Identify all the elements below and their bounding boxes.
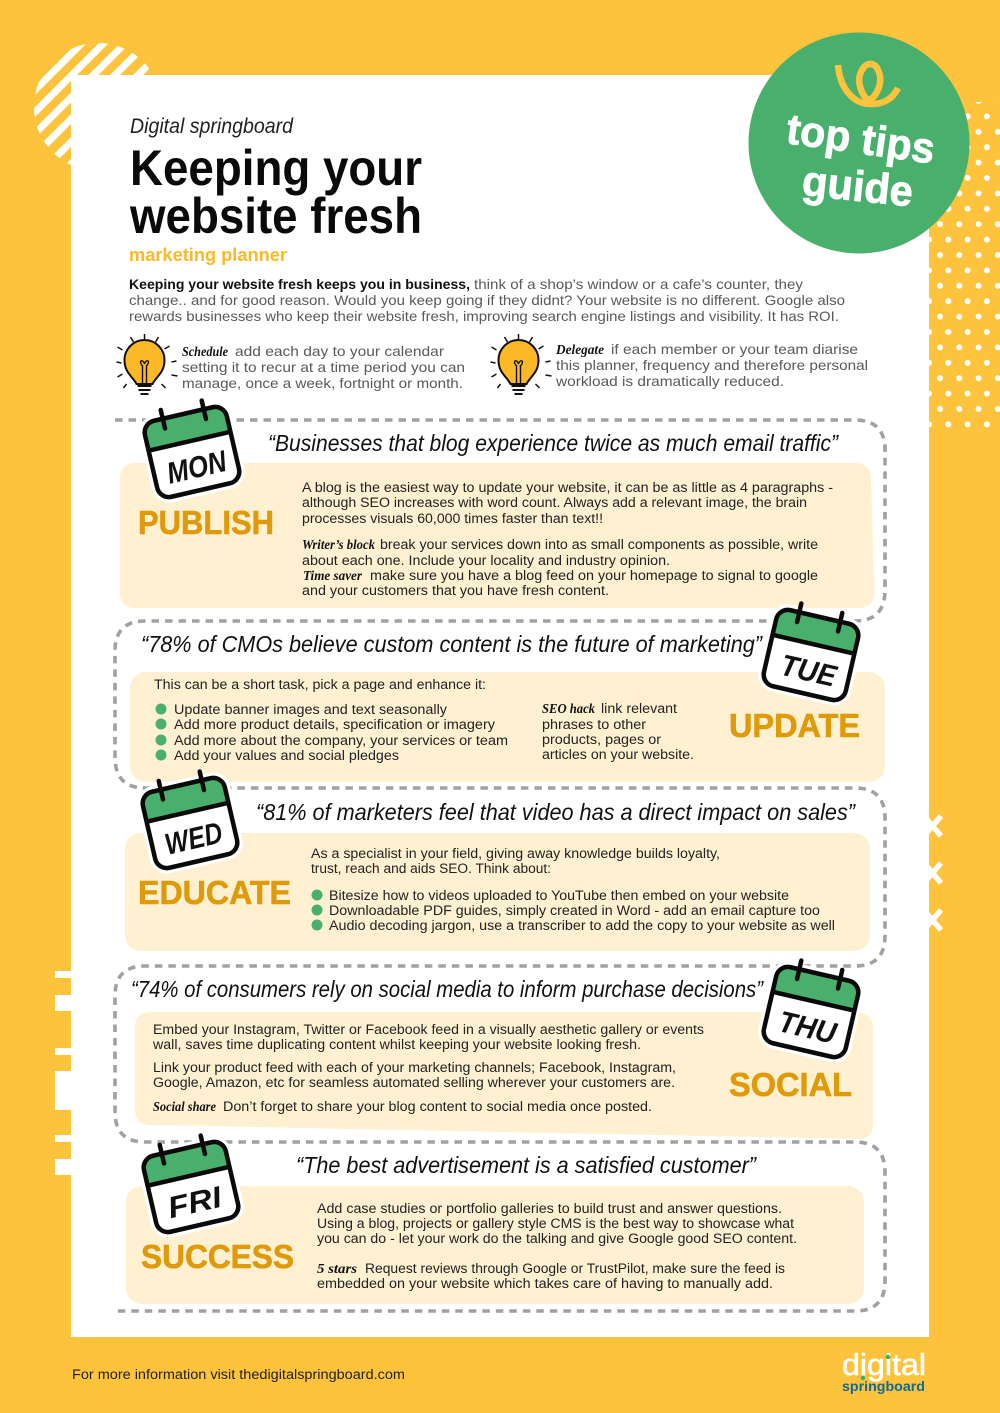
- heading: EDUCATE: [138, 875, 291, 912]
- bullet list: Update banner images and text seasonally: [174, 702, 447, 717]
- body copy: Using a blog, projects or gallery style CMS is the best way to showcase what: [317, 1216, 794, 1231]
- bullet list: Add more about the company, your services or team: [174, 733, 508, 748]
- delegate text: Delegate: [555, 343, 604, 358]
- panel background: [125, 833, 870, 951]
- quote: “Businesses that blog experience twice as much email traffic”: [268, 430, 839, 456]
- intro paragraph: change.. and for good reason. Would you keep going if they didnt? Your website is no different. Google also: [129, 292, 845, 308]
- bullet list: Audio decoding jargon, use a transcriber to add the copy to your website as well: [329, 918, 835, 933]
- body copy: [302, 480, 833, 598]
- panel background: [120, 463, 874, 608]
- bullet list: Bitesize how to videos uploaded to YouTube then embed on your website: [329, 888, 789, 903]
- heading: SUCCESS: [141, 1239, 294, 1276]
- body copy: make sure you have a blog feed on your homepage to signal to google: [370, 568, 818, 583]
- quote: “78% of CMOs believe custom content is the future of marketing”: [141, 631, 763, 657]
- badge text: top tips: top tips: [784, 105, 938, 174]
- body copy: Time saver: [303, 569, 363, 584]
- body copy: break your services down into as small components as possible, write: [380, 537, 818, 552]
- footer link: For more information visit thedigitalspringboard.com: [72, 1367, 405, 1382]
- body copy: Add case studies or portfolio galleries to build trust and answer questions.: [317, 1201, 782, 1216]
- schedule text: [182, 343, 465, 391]
- decorative striped circle: [34, 43, 150, 165]
- body copy: 5 stars: [317, 1262, 358, 1277]
- calendar: FRI: FRI: [165, 1181, 225, 1225]
- body copy: Embed your Instagram, Twitter or Facebook feed in a visually aesthetic gallery or events: [153, 1022, 704, 1037]
- body copy: Writer’s block: [302, 538, 375, 553]
- footer logo: digital: [842, 1348, 926, 1382]
- quote: “74% of consumers rely on social media to inform purchase decisions”: [131, 976, 764, 1002]
- body copy: A blog is the easiest way to update your website, it can be as little as 4 paragraphs -: [302, 480, 833, 495]
- schedule text: Schedule: [182, 345, 228, 360]
- intro paragraph: Keeping your website fresh keeps you in business,: [129, 276, 470, 292]
- body copy: Social share: [153, 1100, 216, 1115]
- panel background: [126, 1186, 864, 1304]
- intro paragraph: think of a shop’s window or a cafe’s counter, they: [474, 276, 803, 292]
- heading: SOCIAL: [729, 1067, 852, 1104]
- calendar: MON: [140, 396, 242, 499]
- bullet list: Add more product details, specification or imagery: [174, 717, 495, 732]
- SEO hack note: phrases to other: [542, 717, 647, 732]
- calendar: TUE: [761, 599, 863, 702]
- quote: “The best advertisement is a satisfied customer”: [296, 1152, 757, 1178]
- delegate text: this planner, frequency and therefore personal: [556, 357, 868, 373]
- calendar: TUE: TUE: [777, 649, 840, 694]
- brand line: Digital springboard: [130, 115, 294, 138]
- white page panel: [71, 75, 929, 1337]
- body copy: wall, saves time duplicating content whilst keeping your website looking fresh.: [152, 1037, 641, 1052]
- tip: schedule: [116, 334, 465, 394]
- intro copy: [311, 846, 720, 876]
- heading: UPDATE: [729, 708, 860, 745]
- schedule text: add each day to your calendar: [235, 343, 444, 359]
- SEO hack note: articles on your website.: [542, 747, 694, 762]
- calendar: THU: [761, 956, 863, 1059]
- body copy: Link your product feed with each of your marketing channels; Facebook, Instagram,: [153, 1060, 676, 1075]
- badge: top tips guide: [748, 32, 970, 254]
- intro copy: trust, reach and aids SEO. Think about:: [311, 861, 551, 876]
- dashed connector running through all sections: [115, 420, 885, 1311]
- header: [129, 115, 422, 265]
- body copy: you can do - let your work do the talking and give Google good SEO content.: [317, 1231, 797, 1246]
- title: website fresh: [129, 188, 422, 244]
- icon: springboard swirl: [838, 64, 898, 104]
- intro paragraph: rewards businesses who keep their website fresh, improving search engine listings and visibility. It has ROI.: [129, 308, 839, 324]
- calendar: WED: [138, 767, 240, 870]
- body copy: Google, Amazon, etc for seamless automated selling wherever your customers are.: [153, 1075, 675, 1090]
- schedule text: manage, once a week, fortnight or month.: [182, 375, 463, 391]
- tip: delegate: [490, 334, 868, 394]
- body copy: processes visuals 60,000 times faster than text!!: [302, 511, 603, 526]
- decorative crosses: [924, 816, 941, 930]
- body copy: Don’t forget to share your blog content to social media once posted.: [223, 1099, 652, 1114]
- icon: light bulb: [116, 334, 178, 394]
- body copy: [152, 1022, 704, 1115]
- calendar: THU: THU: [775, 1005, 840, 1051]
- bullet list: [156, 702, 508, 763]
- calendar: MON: MON: [164, 445, 231, 491]
- quote: “81% of marketers feel that video has a direct impact on sales”: [256, 799, 856, 825]
- subtitle: marketing planner: [129, 244, 287, 265]
- panel: Tuesday update: [130, 599, 885, 782]
- body copy: [317, 1201, 797, 1291]
- panel: Monday publish: [120, 396, 874, 608]
- title: Keeping your: [130, 140, 422, 196]
- icon: light bulb: [490, 334, 552, 394]
- decorative left notches: [55, 971, 71, 1175]
- body copy: about each one. Include your locality and industry opinion.: [302, 553, 670, 568]
- SEO hack note: [542, 701, 694, 762]
- decorative dot pattern: [925, 102, 1000, 432]
- panel: Friday success: [126, 1131, 864, 1304]
- body copy: and your customers that you have fresh content.: [302, 583, 609, 598]
- calendar: FRI: [139, 1131, 241, 1234]
- panel background: [130, 672, 885, 782]
- delegate text: if each member or your team diarise: [611, 341, 858, 357]
- delegate text: workload is dramatically reduced.: [555, 373, 784, 389]
- panel: Thursday social: [131, 956, 873, 1139]
- intro paragraph: [129, 276, 845, 324]
- delegate text: [555, 341, 868, 389]
- calendar: WED: WED: [162, 816, 226, 862]
- bullet list: [312, 888, 835, 933]
- bullet list: Add your values and social pledges: [174, 748, 399, 763]
- intro line: This can be a short task, pick a page and enhance it:: [154, 677, 486, 692]
- title: [129, 140, 422, 244]
- footer logo: springboard: [842, 1378, 925, 1394]
- body copy: Request reviews through Google or TrustPilot, make sure the feed is: [365, 1261, 785, 1276]
- heading: PUBLISH: [138, 505, 274, 542]
- SEO hack note: SEO hack: [542, 702, 595, 717]
- SEO hack note: link relevant: [601, 701, 677, 716]
- badge text: guide: guide: [800, 157, 915, 217]
- panel: Wednesday educate: [125, 767, 870, 951]
- panel background: [135, 1012, 873, 1139]
- body copy: embedded on your website which takes care of having to manually add.: [317, 1276, 773, 1291]
- bullet list: Downloadable PDF guides, simply created in Word - add an email capture too: [329, 903, 820, 918]
- SEO hack note: products, pages or: [542, 732, 662, 747]
- body copy: although SEO increases with word count. Always add a relevant image, the brain: [302, 495, 807, 510]
- intro copy: As a specialist in your field, giving away knowledge builds loyalty,: [311, 846, 720, 861]
- schedule text: setting it to recur at a time period you can: [182, 359, 465, 375]
